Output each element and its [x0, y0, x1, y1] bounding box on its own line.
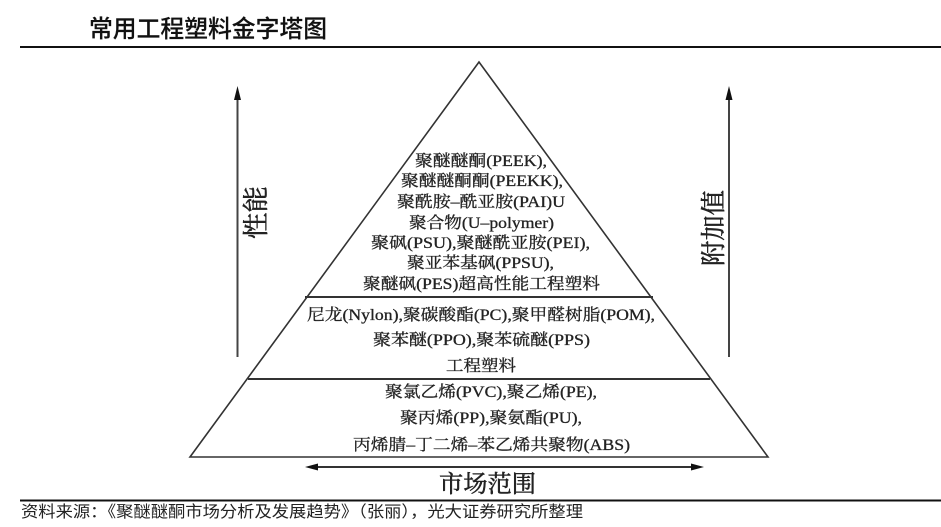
arrow: market range axis [305, 464, 704, 470]
top tier: high performance plastics: 聚亚苯基砜(PPSU), [407, 253, 554, 272]
label: performance: 性能 [242, 186, 271, 239]
middle tier: engineering plastics: 尼龙(Nylon),聚碳酸酯(PC),聚甲醛树脂(POM), [307, 306, 655, 324]
label: added value: 附加值 [700, 190, 728, 266]
bottom tier: general plastics: 聚丙烯(PP),聚氨酯(PU), [400, 408, 582, 427]
top tier: high performance plastics: 聚醚醚酮酮(PEEKK), [401, 172, 563, 190]
bottom tier: general plastics: 丙烯腈–丁二烯–苯乙烯共聚物(ABS) [353, 435, 630, 454]
arrow: added value axis [726, 86, 732, 357]
arrow: performance axis [234, 86, 241, 357]
top tier: high performance plastics: 聚醚醚酮(PEEK), [415, 152, 547, 170]
top tier: high performance plastics: 聚醚砜(PES)超高性能工程塑料 [363, 274, 600, 293]
middle tier: engineering plastics: 聚苯醚(PPO),聚苯硫醚(PPS) [373, 330, 590, 349]
top tier: high performance plastics: 聚酰胺–酰亚胺(PAI)U [397, 193, 565, 211]
title: 常用工程塑料金字塔图 [89, 16, 327, 43]
label: market range: 市场范围 [439, 471, 536, 498]
middle tier: engineering plastics: 工程塑料 [446, 357, 516, 375]
top tier: high performance plastics: 聚砜(PSU),聚醚酰亚胺(PEI), [371, 234, 590, 252]
top tier: high performance plastics [363, 152, 600, 293]
source note: 资料来源：《聚醚醚酮市场分析及发展趋势》（张丽），光大证券研究所整理 [21, 503, 583, 521]
top tier: high performance plastics: 聚合物(U–polymer) [409, 214, 554, 232]
bottom rule [20, 500, 941, 502]
bottom tier: general plastics: 聚氯乙烯(PVC),聚乙烯(PE), [385, 382, 597, 401]
middle tier: engineering plastics [307, 306, 655, 375]
bottom tier: general plastics [353, 382, 630, 454]
top rule [20, 46, 941, 48]
pyramid outline [190, 62, 768, 457]
